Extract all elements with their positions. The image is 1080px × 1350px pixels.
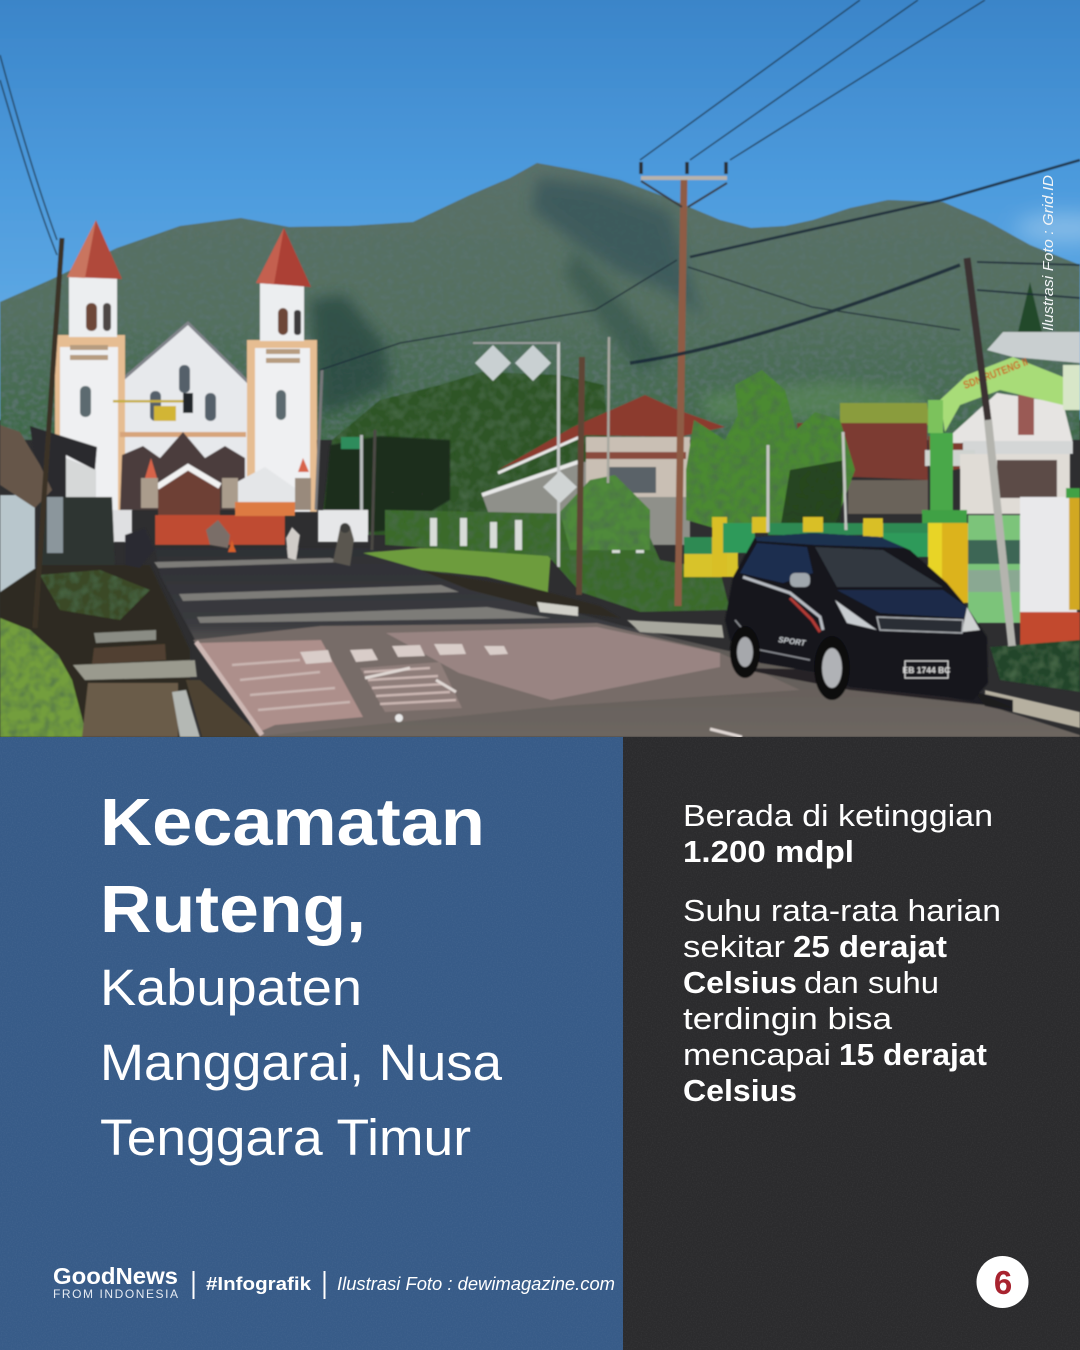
panel: blue title panel xyxy=(0,737,623,1350)
hood xyxy=(837,590,967,618)
bank and kerbs xyxy=(420,570,724,638)
signal and yellow board xyxy=(154,406,176,421)
text block: temperature: 25 derajat xyxy=(793,929,947,964)
footer tag: #Infografik: #Infografik xyxy=(206,1274,312,1294)
cloud wisp xyxy=(1015,214,1080,242)
white fence walls xyxy=(318,510,368,542)
mirror xyxy=(790,573,810,587)
nave xyxy=(124,324,248,478)
left ground and grass xyxy=(0,565,262,737)
text block: temperature: Celsius xyxy=(683,965,797,1000)
nave windows xyxy=(179,365,190,393)
photo credit: Ilustrasi Foto : Grid.ID xyxy=(1040,175,1057,331)
arch lettering: SDN RUTENG II xyxy=(962,356,1030,392)
headlights xyxy=(835,600,877,630)
green lattice xyxy=(928,400,943,433)
road xyxy=(155,548,1080,737)
windscreen xyxy=(815,547,943,587)
wheels xyxy=(730,626,760,678)
sunlit lower slopes xyxy=(700,382,930,420)
text block: temperature: mencapai xyxy=(683,1037,831,1072)
entrance gables xyxy=(120,432,245,510)
road light bands xyxy=(154,558,551,623)
cypress tree xyxy=(1018,282,1042,332)
photo: Ruteng street with church and mountain xyxy=(0,0,1080,737)
text block: temperature: 15 derajat xyxy=(839,1037,987,1072)
sky xyxy=(0,0,1080,420)
heading: Kecamatan Ruteng xyxy=(100,785,485,947)
car body xyxy=(725,533,988,700)
painted pink crossing xyxy=(193,623,800,737)
text block: altitude xyxy=(683,798,993,869)
grass and kerb at right xyxy=(975,640,1080,728)
footer credit: photo source: Ilustrasi Foto : dewimagazine.com xyxy=(337,1274,615,1294)
page number badge: 6 xyxy=(994,1264,1012,1301)
yellow and green fence xyxy=(684,517,928,577)
building on right with green arch xyxy=(922,332,1080,646)
panel: dark facts panel xyxy=(623,737,1080,1350)
tree cluster right of pole xyxy=(686,370,855,530)
black car xyxy=(725,533,1013,708)
black car: EB 1744 BC xyxy=(903,665,950,675)
side stripes xyxy=(743,577,823,630)
text block: temperature: sekitar xyxy=(683,929,785,964)
left tower xyxy=(55,335,125,510)
white fence and shrubs xyxy=(385,475,730,612)
mountain range xyxy=(0,163,1080,440)
red gate xyxy=(155,515,285,545)
model badge: SPORT xyxy=(778,635,807,648)
text block: altitude: 1.200 mdpl xyxy=(683,834,854,869)
logo: GoodNews from Indonesia: GoodNews xyxy=(53,1263,178,1289)
subheading: Kabupaten Manggarai, Nusa Tenggara Timur: Kabupaten xyxy=(100,959,362,1016)
page number badge xyxy=(976,1256,1028,1308)
power lines xyxy=(0,0,1080,370)
lower diagonal shadow xyxy=(565,250,668,372)
green gate xyxy=(968,515,1028,623)
second red roof xyxy=(797,403,985,514)
footer tag: #Infografik xyxy=(192,1271,312,1299)
right tower xyxy=(247,340,317,512)
logo: GoodNews from Indonesia xyxy=(53,1263,178,1301)
yellow gate pillar xyxy=(941,522,970,604)
logo: GoodNews from Indonesia: FROM INDONESIA xyxy=(53,1287,178,1301)
lawn xyxy=(363,548,551,592)
side windows xyxy=(740,543,813,583)
text block: temperature: Celsius xyxy=(683,1073,797,1108)
text block: temperature: dan suhu xyxy=(804,965,939,1000)
shadow behind church xyxy=(310,295,390,415)
subheading: Kabupaten Manggarai, Nusa Tenggara Timur xyxy=(100,959,503,1166)
left shop with thatch xyxy=(0,425,115,592)
valley shadow under main peak xyxy=(532,178,705,318)
subheading: Kabupaten Manggarai, Nusa Tenggara Timur: Manggarai, Nusa xyxy=(100,1034,503,1091)
church xyxy=(55,220,368,545)
heading: Kecamatan Ruteng: Ruteng, xyxy=(100,872,366,947)
grain overlay xyxy=(0,737,1080,1350)
motorbikes and people xyxy=(125,520,354,568)
subheading: Kabupaten Manggarai, Nusa Tenggara Timur: Tenggara Timur xyxy=(100,1109,471,1166)
heading: Kecamatan Ruteng: Kecamatan xyxy=(100,785,485,860)
road signs xyxy=(341,342,577,567)
text block: temperature xyxy=(683,893,1001,1108)
long house with red roof xyxy=(482,395,725,545)
text block: altitude: Berada di ketinggian xyxy=(683,798,993,833)
trees behind road xyxy=(322,372,608,540)
utility poles xyxy=(35,162,1012,646)
grille xyxy=(877,617,963,633)
text block: temperature: terdingin bisa xyxy=(683,1001,893,1036)
white utility box xyxy=(1020,497,1077,612)
text block: temperature: Suhu rata-rata harian xyxy=(683,893,1001,928)
orange band xyxy=(120,432,246,437)
number plate xyxy=(905,661,948,678)
